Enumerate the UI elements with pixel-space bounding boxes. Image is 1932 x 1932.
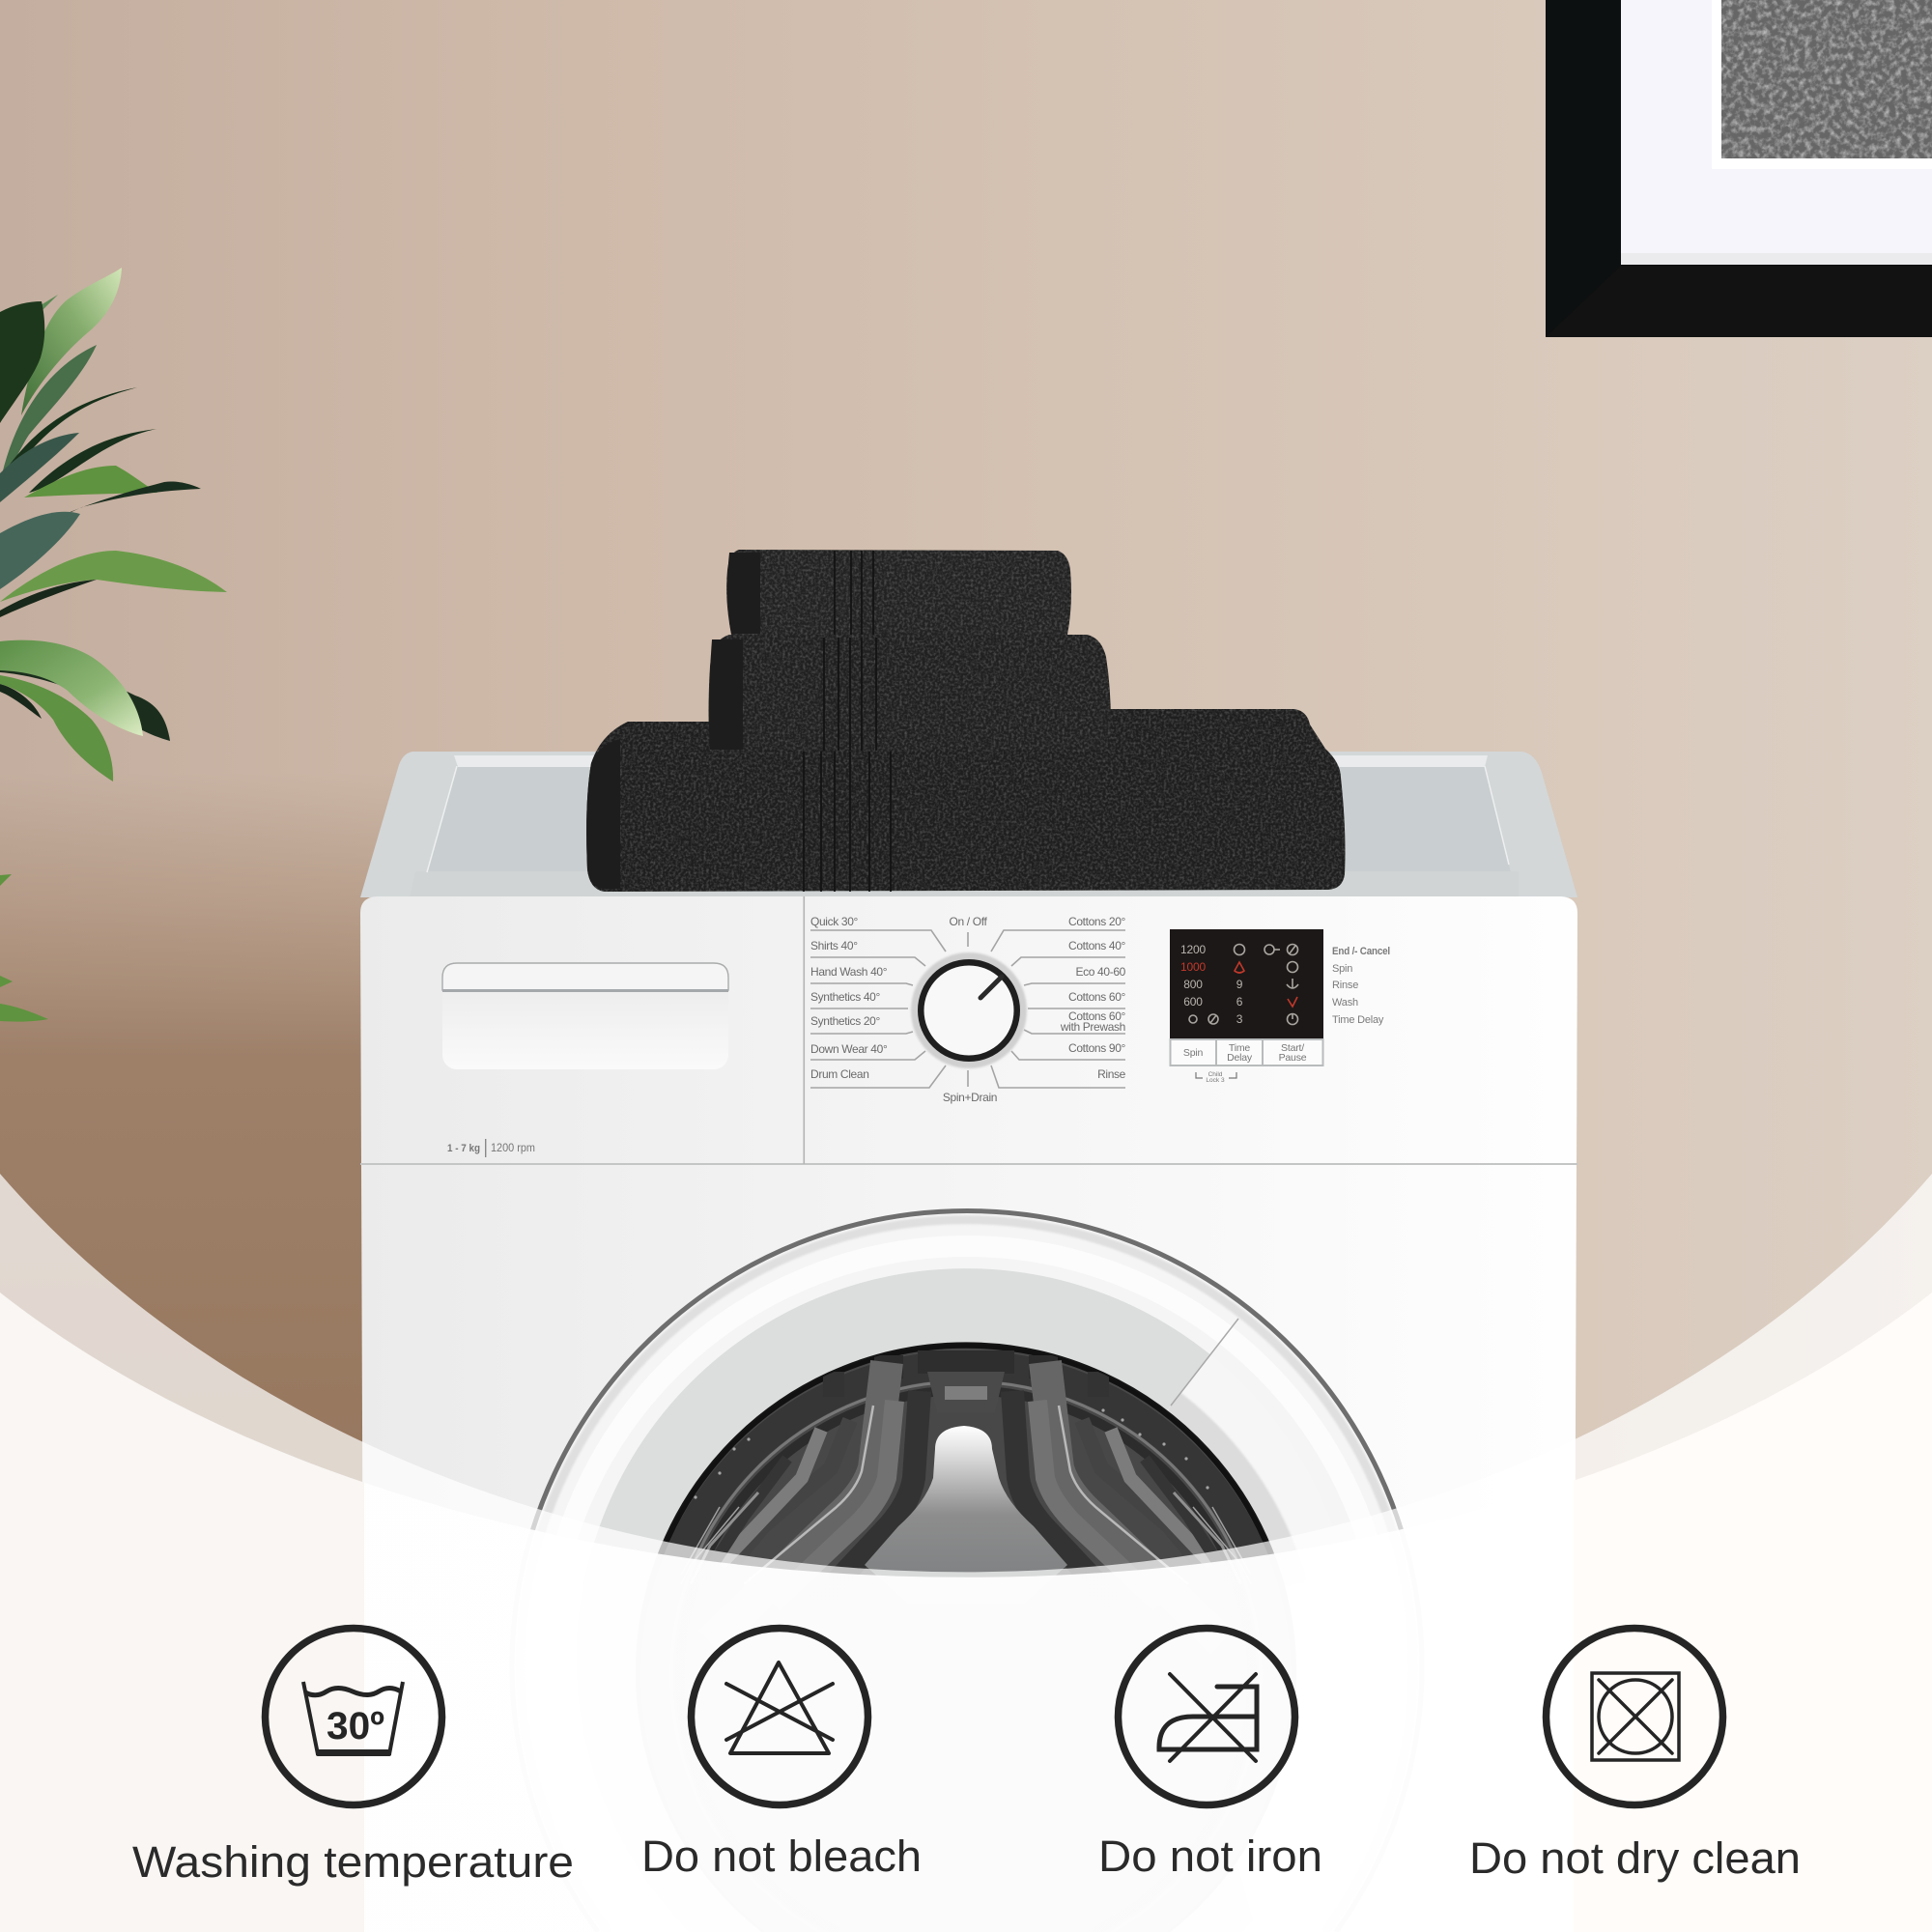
control buttons: Delay [1227, 1052, 1253, 1064]
programme dial labels: Cottons 90° [1068, 1041, 1126, 1055]
leaf: dark thin [0, 387, 137, 488]
towel: small [726, 550, 1071, 635]
door [530, 1208, 1404, 1577]
display screen: 1000 [1180, 960, 1206, 974]
panel seams [360, 896, 1577, 1165]
programme dial leader lines [810, 930, 1125, 1088]
leaf: dark long thin [0, 482, 201, 558]
machine top surface [360, 752, 1577, 897]
door hinge wedge [1168, 1393, 1292, 1542]
leaf: stray tips [0, 874, 48, 1022]
leaf: small teal [0, 345, 97, 483]
programme dial labels: Hand Wash 40° [810, 965, 888, 979]
leaf: dark thin 2 [29, 429, 156, 493]
programme dial labels: Cottons 20° [1068, 915, 1126, 928]
display legend: End /- Cancel [1332, 946, 1390, 957]
display icons [1189, 945, 1298, 1024]
caption: do not bleach: Do not bleach [641, 1832, 922, 1881]
care icon: do not bleach [692, 1629, 867, 1804]
display legend: Rinse [1332, 980, 1358, 991]
child lock label: Child [1208, 1071, 1223, 1078]
display screen: 600 [1183, 995, 1203, 1009]
child lock label: Lock 3 [1206, 1077, 1225, 1084]
display legend: Spin [1332, 963, 1352, 975]
leaf: dark under [0, 580, 97, 617]
programme dial labels: On / Off [949, 915, 988, 928]
display legend: Time Delay [1332, 1014, 1384, 1026]
programme dial labels: Synthetics 40° [810, 990, 880, 1004]
programme dial labels: Eco 40-60 [1075, 965, 1126, 979]
programme dial labels: Down Wear 40° [810, 1042, 888, 1056]
translucent band overlay [0, 1174, 1932, 1932]
care icon: washing temperature: 30º [327, 1705, 384, 1747]
washing machine [360, 752, 1577, 1577]
care icon: do not dry clean [1546, 1629, 1723, 1804]
capacity label: 1200 rpm [491, 1143, 535, 1154]
leaf: pale top [21, 268, 122, 415]
detergent drawer [442, 963, 728, 1069]
display screen [1170, 929, 1323, 1038]
capacity label [447, 1139, 535, 1157]
programme dial labels: Quick 30° [810, 915, 859, 928]
child lock label [1196, 1071, 1236, 1084]
caption: washing temperature: Washing temperature [132, 1837, 574, 1887]
display screen: 3 [1236, 1012, 1243, 1026]
control buttons [1171, 1039, 1323, 1065]
programme dial labels: Cottons 40° [1068, 939, 1126, 952]
leaf: teal mid [0, 433, 79, 502]
programme dial labels: Spin+Drain [943, 1091, 997, 1104]
door outer rim [512, 1210, 1422, 1932]
control buttons: Spin [1183, 1047, 1203, 1059]
drum [660, 1344, 1272, 1577]
towel: medium [709, 635, 1111, 751]
plant [0, 268, 227, 1022]
programme dial labels: Drum Clean [810, 1067, 869, 1081]
capacity label: 1 - 7 kg [447, 1143, 480, 1154]
leaf: long green [0, 551, 227, 602]
caption: do not dry clean: Do not dry clean [1469, 1833, 1801, 1883]
leaf: teal low [0, 512, 80, 589]
programme dial labels: with Prewash [1060, 1020, 1125, 1034]
white footer overlay [0, 1293, 1932, 1932]
control buttons: Start/ [1281, 1042, 1304, 1054]
door glass frame [599, 1268, 1209, 1542]
display screen: 9 [1236, 978, 1243, 991]
care icon: washing temperature [265, 1629, 442, 1804]
leaf: dark low right [0, 667, 170, 741]
machine body [360, 896, 1577, 1932]
programme dial labels: Shirts 40° [810, 939, 858, 952]
programme dial labels: Rinse [1097, 1067, 1126, 1081]
leaf: pale low [0, 640, 143, 736]
programme dial labels [810, 915, 1126, 1104]
leaf: dark large [0, 301, 44, 423]
display screen: 6 [1236, 995, 1243, 1009]
programme dial labels: Cottons 60° [1068, 1009, 1126, 1023]
towel hems [586, 553, 760, 889]
display legend [1332, 946, 1390, 1026]
display screen: 800 [1183, 978, 1203, 991]
display screen: 1200 [1180, 943, 1206, 956]
picture frame [1546, 0, 1932, 337]
picture artwork [1721, 0, 1932, 158]
care icon: do not iron [1119, 1629, 1294, 1804]
display legend: Wash [1332, 997, 1358, 1009]
towels [586, 550, 1345, 892]
leaf: bright mid [24, 466, 157, 497]
leaf: dark small [0, 684, 42, 719]
control buttons: Pause [1279, 1052, 1307, 1064]
towel stripes [804, 551, 891, 892]
caption: do not iron: Do not iron [1098, 1832, 1322, 1881]
programme dial labels: Synthetics 20° [810, 1014, 880, 1028]
leaf: green low [0, 675, 113, 781]
programme dial labels: Cottons 60° [1068, 990, 1126, 1004]
control buttons: Time [1229, 1042, 1250, 1054]
towel: large [586, 709, 1345, 892]
programme dial knob [911, 952, 1027, 1068]
